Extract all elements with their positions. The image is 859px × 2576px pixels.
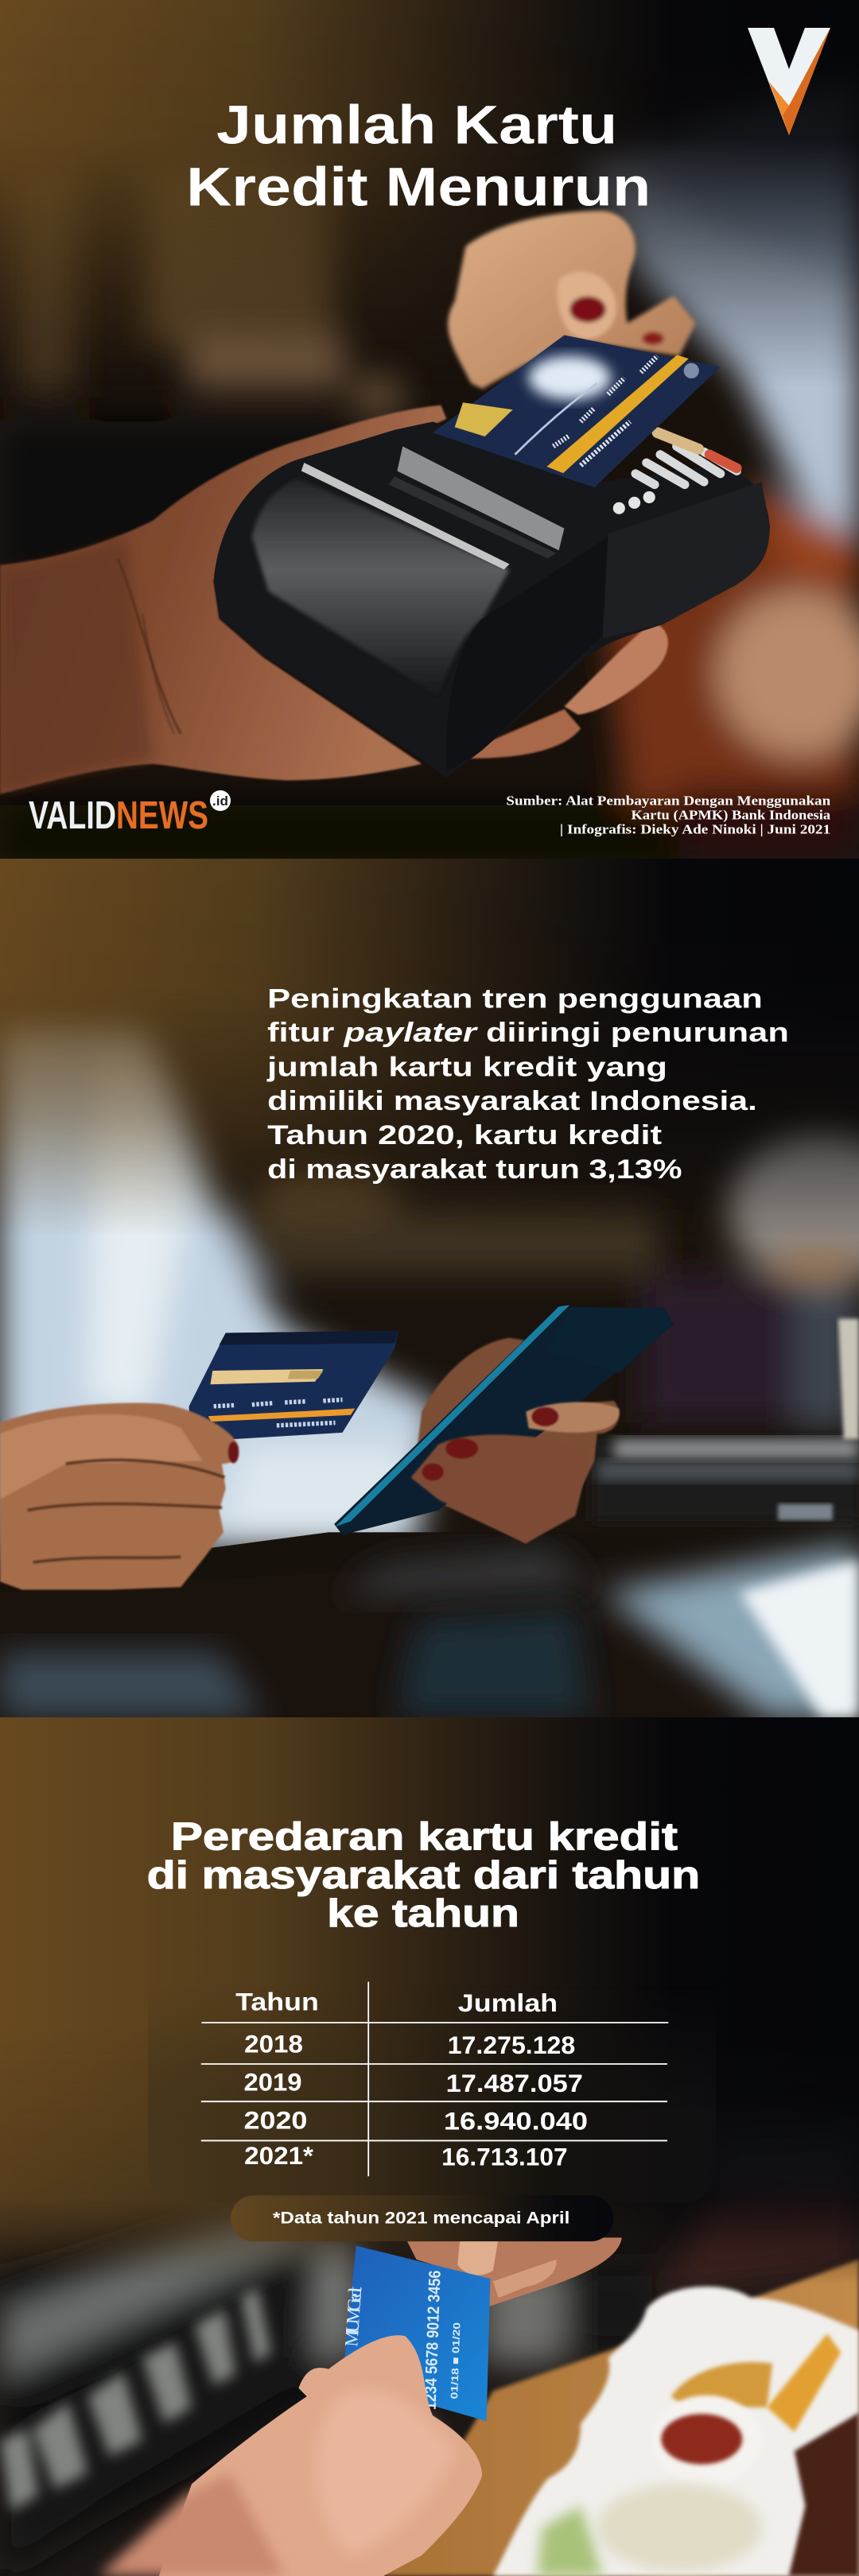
row 2020 [244,2105,588,2136]
heading: Peredaran kartu kredit [171,1814,678,1859]
row 2021 [244,2141,568,2171]
intro text: dimiliki masyarakat Indonesia. [267,1086,757,1116]
table header [235,1987,558,2017]
footnote pill: *Data tahun 2021 mencapai April [273,2208,569,2227]
source credit: Kartu (APMK) Bank Indonesia [631,807,831,822]
photo: lower hand holding terminal [0,405,668,794]
table header: Tahun [235,1987,319,2015]
photo backdrop: blurred restaurant counter and table [0,1717,859,2576]
title: Jumlah Kartu [216,94,617,155]
row 2020: 2020 [244,2105,307,2134]
intro text: Tahun 2020, kartu kredit [267,1120,663,1150]
table grid lines [201,1982,668,2176]
panel: card circulation table with restaurant photo [0,1717,859,2576]
title [190,103,647,206]
intro text: Peningkatan tren penggunaan [267,983,763,1014]
intro text: di masyarakat turun 3,13% [267,1154,682,1185]
table header: Jumlah [458,1988,558,2017]
intro text [266,983,789,1185]
row 2018: 17.275.128 [448,2031,575,2059]
heading: ke tahun [327,1891,519,1935]
photo: black card terminal [214,421,770,778]
photo backdrop: blurred cafe and shirt [0,1012,859,1717]
logo: Validnews: VALID [29,794,116,837]
photo: terminal keypad [613,433,737,514]
row 2019 [244,2068,583,2097]
table background panel [148,1947,716,2203]
photo: smartphone [334,1305,674,1535]
row 2021: 16.713.107 [441,2142,568,2171]
row 2019: 17.487.057 [446,2069,583,2097]
photo: upper hand holding card [448,211,696,389]
logo: Validnews: NEWS [116,794,208,837]
table: credit cards by year [201,1982,668,2176]
logo: Validnews: .id [212,793,228,809]
brown to black gradient overlay [0,859,859,1228]
logo: Validnews [29,790,231,837]
heading [147,1814,700,1935]
row 2020: 16.940.040 [444,2107,588,2136]
icon: V brand mark [748,28,830,135]
source credit [506,793,831,836]
row 2018 [244,2030,575,2059]
photo: blue credit card: MIUM Credit [341,2286,366,2348]
brown to black gradient overlay [0,0,859,375]
panel: title section with card payment terminal photo [0,0,859,865]
row 2021: 2021* [244,2141,314,2170]
footnote pill [231,2195,613,2241]
photo: blue credit card: 01/18 ■ 01/20 [449,2322,462,2399]
photo: hand holding phone [414,1338,619,1543]
source credit: | Infografis: Dieky Ade Ninoki | Juni 2021 [560,821,830,836]
phone holding fingers front [411,1402,620,1543]
photo: navy credit card [433,336,721,487]
intro text: fitur paylater diiringi penurunan [267,1018,789,1048]
heading: di masyarakat dari tahun [147,1852,700,1897]
title: Kredit Menurun [186,156,651,217]
photo: credit card held in left hand [189,1331,398,1442]
photo: blue credit card: 1234 5678 9012 3456 [422,2270,445,2410]
panel: paylater intro with phone and card photo [0,859,859,1717]
brown to black gradient overlay [0,1717,859,2576]
photo: plate of food [493,2287,859,2576]
row 2018: 2018 [244,2030,303,2058]
row 2019: 2019 [244,2068,302,2097]
intro text: jumlah kartu kredit yang [266,1052,667,1082]
photo backdrop: blurred restaurant interior [0,91,859,859]
source credit: Sumber: Alat Pembayaran Dengan Menggunakan [506,793,830,809]
photo: left hand [0,1402,239,1590]
photo: blue credit card [341,2246,490,2421]
photo: server hand gripping blue card [406,2237,622,2306]
photo: customer hand holding card [99,2335,482,2576]
